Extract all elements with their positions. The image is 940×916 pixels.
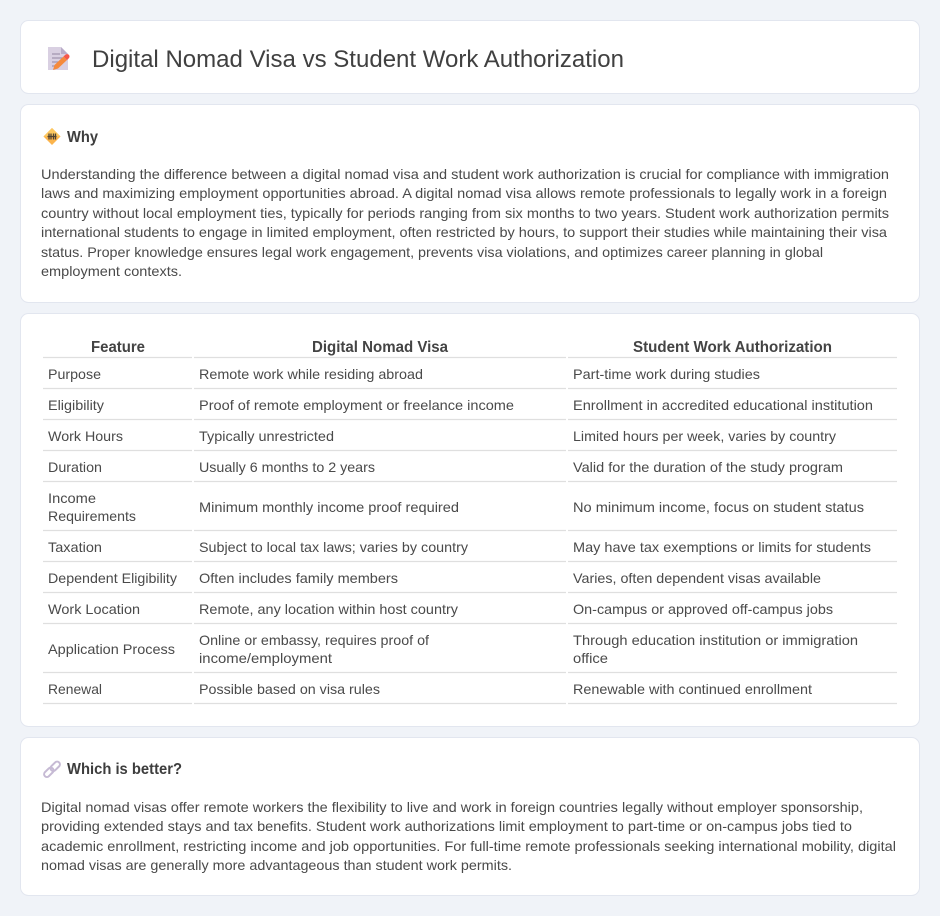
row: work location: Remote, any location within host country bbox=[199, 601, 458, 617]
row: taxation bbox=[48, 539, 871, 555]
panel: title card bbox=[20, 20, 920, 94]
row: work location: Work Location bbox=[48, 601, 140, 617]
row: application process bbox=[48, 632, 858, 666]
row: work hours bbox=[48, 428, 836, 444]
panel: which is better bbox=[20, 738, 920, 896]
table header: Student Work Authorization bbox=[633, 339, 832, 356]
row: taxation: Taxation bbox=[48, 539, 102, 555]
text block: why explanation: status. Proper knowledge ensures legal work engagement, prevents visa violations, and optimizes career planning in global bbox=[41, 244, 823, 260]
row: purpose: Purpose bbox=[48, 366, 101, 382]
row: work hours: Work Hours bbox=[48, 428, 123, 444]
heading: which is better: Which is better? bbox=[67, 761, 182, 778]
text block: which is better explanation bbox=[41, 799, 896, 873]
row: duration: Usually 6 months to 2 years bbox=[199, 459, 375, 475]
panel: comparison table bbox=[20, 314, 920, 726]
row: eligibility: Eligibility bbox=[48, 397, 104, 413]
row: work hours: Typically unrestricted bbox=[199, 428, 334, 444]
row: purpose: Remote work while residing abroad bbox=[199, 366, 423, 382]
row: dependent eligibility: Often includes family members bbox=[199, 570, 398, 586]
title: Digital Nomad Visa vs Student Work Authorization bbox=[92, 46, 624, 73]
row: eligibility: Enrollment in accredited educational institution bbox=[573, 397, 873, 413]
text block: why explanation: Understanding the difference between a digital nomad visa and student work authorization is crucial for compliance with immigration bbox=[41, 166, 889, 182]
row: income requirements: Income bbox=[48, 490, 96, 506]
table header: Feature bbox=[91, 339, 145, 356]
row: eligibility bbox=[48, 397, 873, 413]
table header: Digital Nomad Visa bbox=[312, 339, 448, 356]
row: work location bbox=[48, 601, 833, 617]
text block: which is better explanation: providing extended stays and tax benefits. Student work authorizations limit employment to part-time or on-campus jobs tied to bbox=[41, 818, 852, 834]
row: work hours: Limited hours per week, varies by country bbox=[573, 428, 836, 444]
row: taxation: Subject to local tax laws; varies by country bbox=[199, 539, 468, 555]
row: application process: Application Process bbox=[48, 641, 175, 657]
text block: why explanation: laws and maximizing employment opportunities abroad. A digital nomad visa allows remote professionals to legally work in a foreign bbox=[41, 185, 887, 201]
row: dependent eligibility: Varies, often dependent visas available bbox=[573, 570, 821, 586]
row: purpose: Part-time work during studies bbox=[573, 366, 760, 382]
row: income requirements: Minimum monthly income proof required bbox=[199, 499, 459, 515]
text block: which is better explanation: academic enrollment, restricting income and job opportunities. For full-time remote professionals seeking international mobility, digital bbox=[41, 838, 896, 854]
row: taxation: May have tax exemptions or limits for students bbox=[573, 539, 871, 555]
row: application process: office bbox=[573, 650, 608, 666]
text block: why explanation bbox=[41, 166, 889, 279]
row: renewal: Renewal bbox=[48, 681, 102, 697]
text block: why explanation: international students to engage in limited employment, often restricted by hours, to support their studies while maintaining their visa bbox=[41, 224, 887, 240]
row: purpose bbox=[48, 366, 760, 382]
row: renewal: Renewable with continued enrollment bbox=[573, 681, 812, 697]
row: dependent eligibility bbox=[48, 570, 821, 586]
icon: document with pencil bbox=[48, 47, 70, 70]
row: eligibility: Proof of remote employment or freelance income bbox=[199, 397, 514, 413]
row: renewal: Possible based on visa rules bbox=[199, 681, 380, 697]
row: duration: Valid for the duration of the study program bbox=[573, 459, 843, 475]
row: income requirements: Requirements bbox=[48, 508, 136, 524]
text block: which is better explanation: nomad visas are generally more advantageous than student work permits. bbox=[41, 857, 512, 873]
text block: which is better explanation: Digital nomad visas offer remote workers the flexibility to live and work in foreign countries legally without employer sponsorship, bbox=[41, 799, 863, 815]
panel: why bbox=[20, 104, 920, 302]
table header bbox=[91, 339, 832, 356]
row: application process: income/employment bbox=[199, 650, 332, 666]
row: duration bbox=[48, 459, 843, 475]
heading: why: Why bbox=[67, 129, 98, 146]
row: duration: Duration bbox=[48, 459, 102, 475]
text block: why explanation: country without local employment ties, typically for periods ranging from six months to two years. Student work authorization permits bbox=[41, 205, 889, 221]
row: application process: Online or embassy, requires proof of bbox=[199, 632, 429, 648]
row: work location: On-campus or approved off-campus jobs bbox=[573, 601, 833, 617]
row: income requirements bbox=[48, 490, 864, 524]
icon: diamond sign bbox=[44, 128, 60, 145]
icon: chain link bbox=[43, 760, 61, 778]
row: application process: Through education institution or immigration bbox=[573, 632, 858, 648]
row: renewal bbox=[48, 681, 812, 697]
row: income requirements: No minimum income, focus on student status bbox=[573, 499, 864, 515]
row: dependent eligibility: Dependent Eligibility bbox=[48, 570, 177, 586]
text block: why explanation: employment contexts. bbox=[41, 263, 182, 279]
